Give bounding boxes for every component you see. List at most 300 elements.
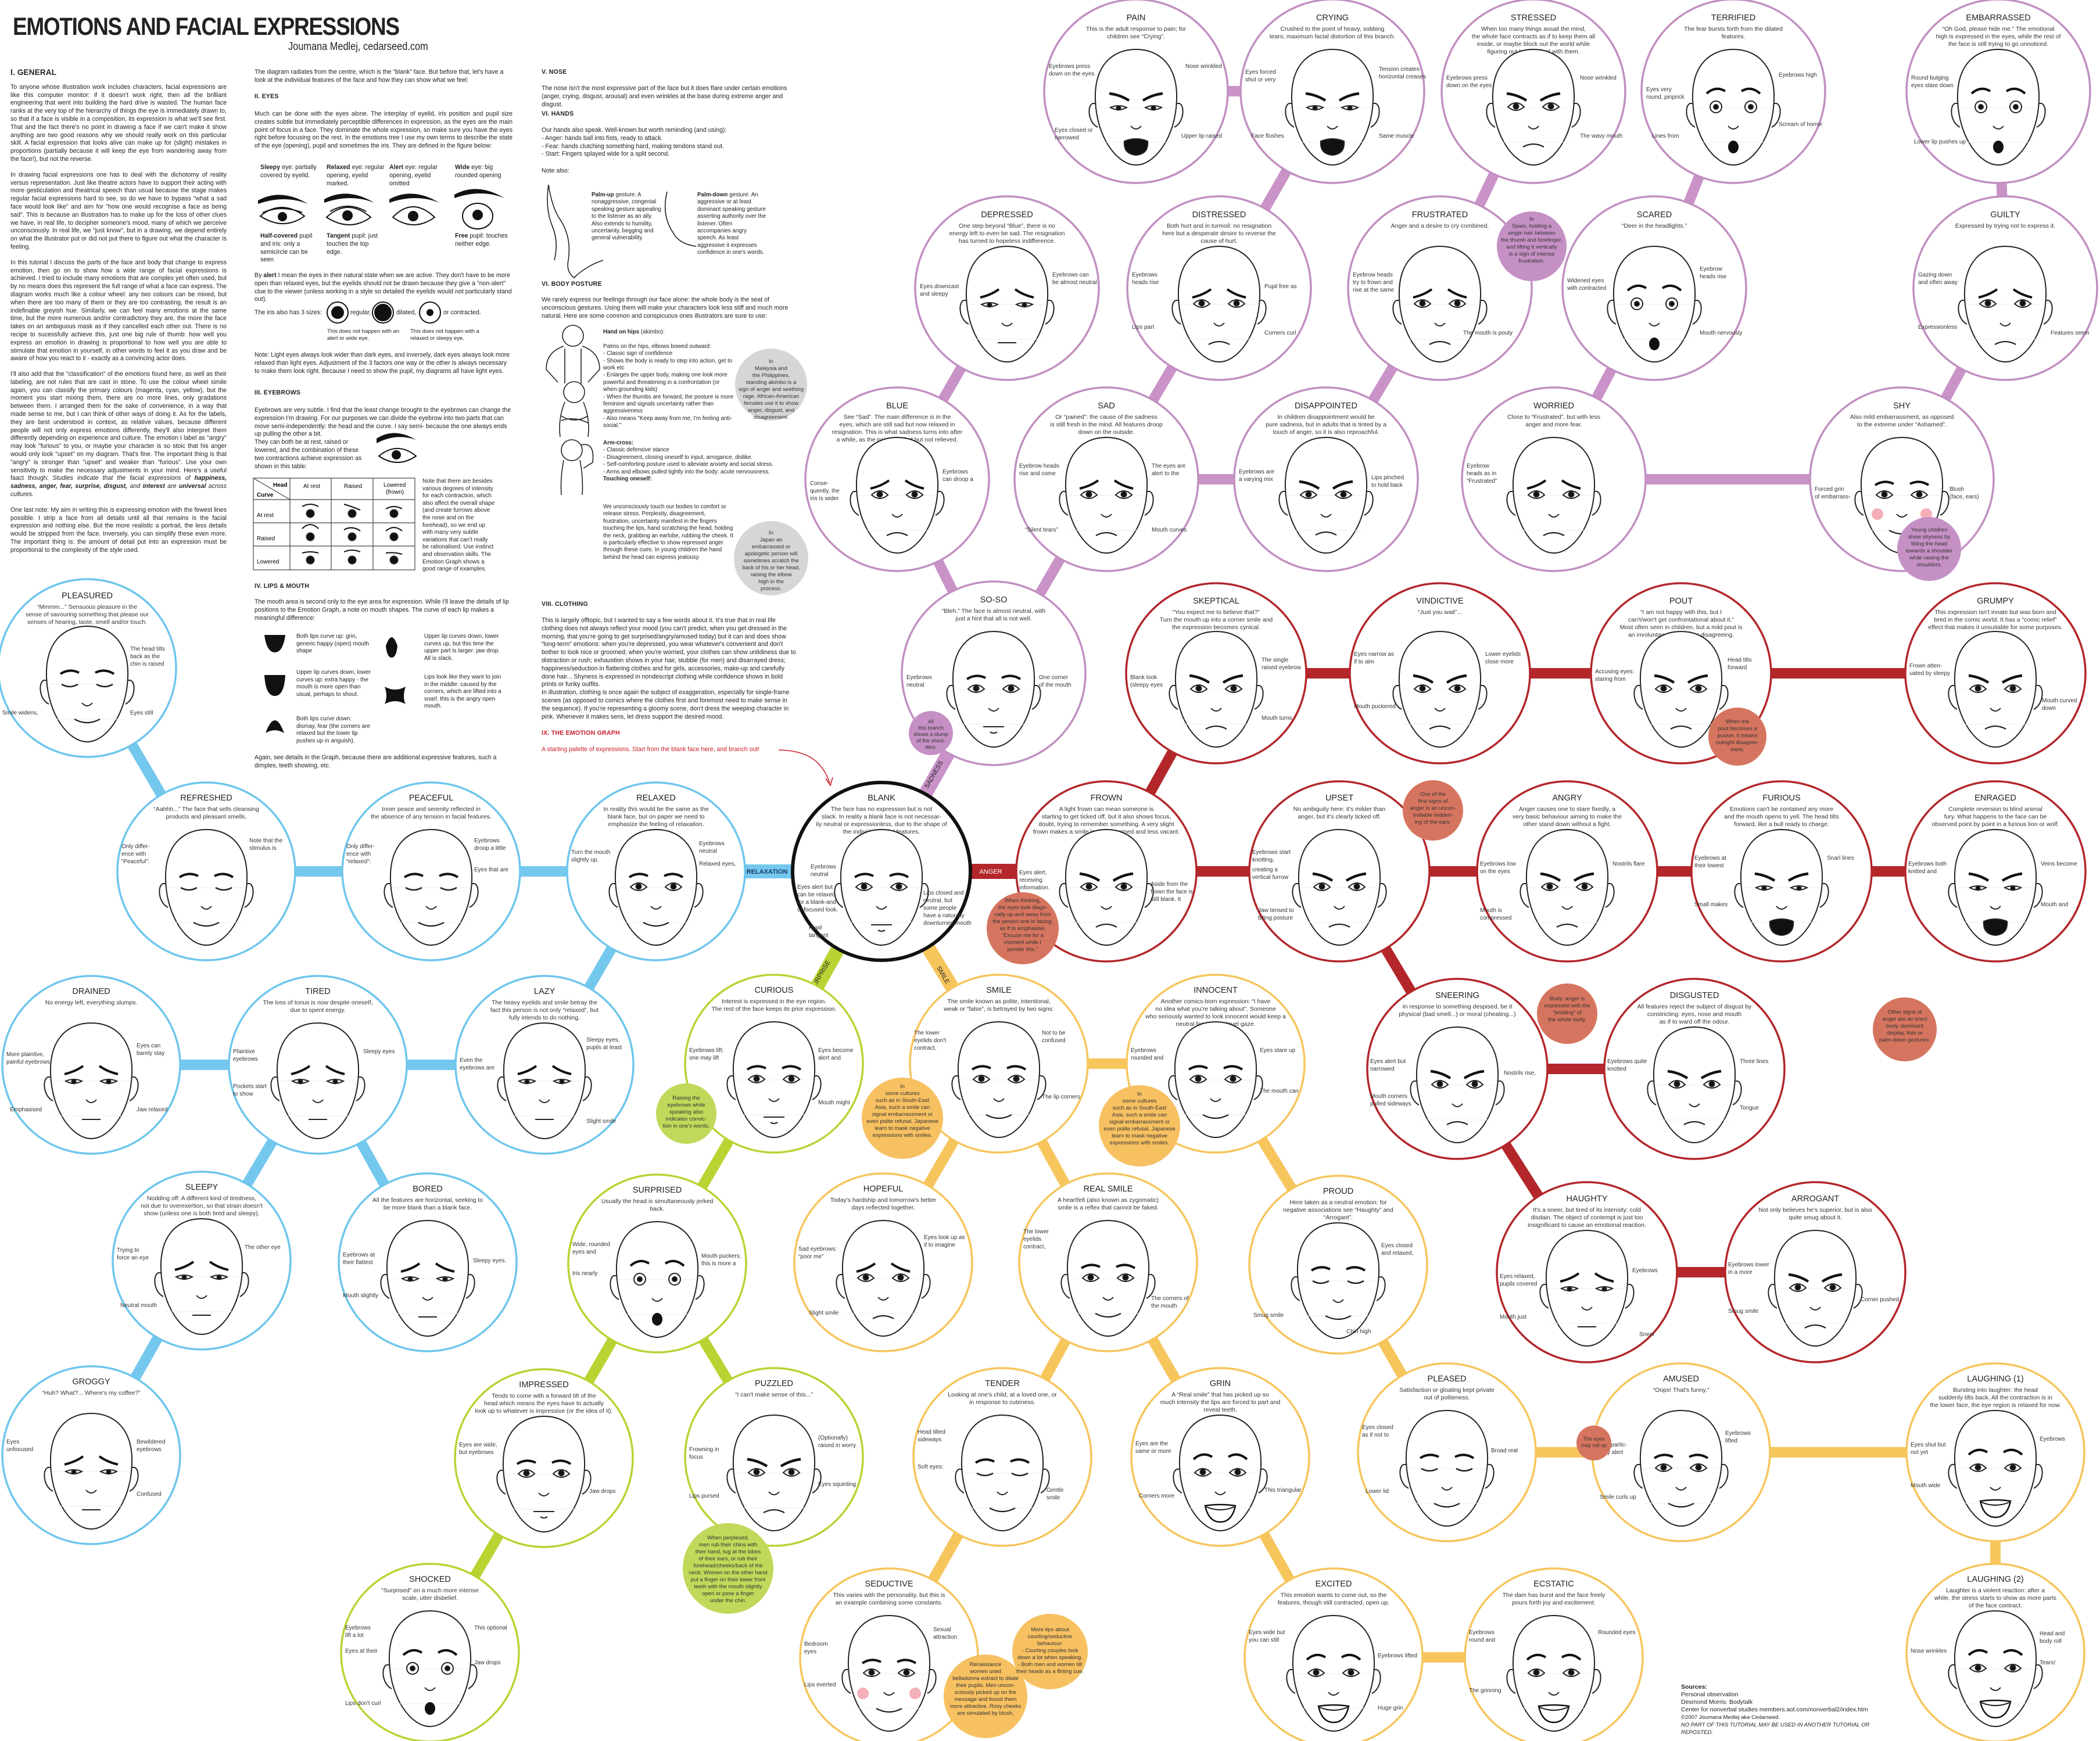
circle: HAUGHTY: [1497, 1182, 1677, 1362]
circle: SNEERING: SNEERING: [1435, 991, 1479, 1000]
circle: REAL SMILE: The corners of: [1151, 1295, 1189, 1302]
circle: GRIN: much intensity the lips are forced to part and: [1160, 1399, 1280, 1406]
circle: HOPEFUL: Sad eyebrows:: [798, 1246, 837, 1252]
circle: GUILTY: GUILTY: [1990, 210, 2020, 220]
text: palm gestures: Palm-up gesture: A nonaggressive, congenial speaking gesture appealing to the listener as an ally. Also extends to humility, uncertainty, begging and general vulnerability.: [592, 192, 661, 241]
circle: BLANK: unfocused look.: [797, 907, 838, 913]
circle: SHOCKED: lift a lot: [345, 1632, 364, 1639]
callout: haughty eyes: may roll up: [1581, 1442, 1607, 1448]
callout: pout: pout becomes a: [1718, 726, 1758, 732]
circle: LAZY: fully intends to do nothing.: [509, 1014, 580, 1021]
circle: SURPRISED: Mouth puckers;: [701, 1253, 741, 1259]
callout: puzzled: [683, 1523, 773, 1614]
circle: LAUGHING (1): the lower face, the eye region is relaxed for now.: [1930, 1402, 2061, 1409]
circle: FURIOUS: and the mouth opens to yell. The head tilts: [1724, 813, 1839, 820]
callout: akimbo grey: disagreement.: [754, 414, 789, 421]
heading: IV. LIPS & MOUTH: IV. LIPS & MOUTH: [255, 583, 309, 590]
circle: GUILTY: Features seem: [2051, 330, 2090, 336]
circle: SURPRISED: Wide, rounded: [572, 1241, 610, 1248]
circle: LAUGHING (2): [1907, 1564, 2084, 1741]
circle: PROUD: Chin high: [1346, 1329, 1371, 1335]
circle: SAD: “Silent tears”: [1025, 527, 1058, 533]
callout: smile cultures: In: [900, 1083, 905, 1090]
circle: DRAINED: DRAINED: [72, 987, 110, 996]
connectors: green surprise branch: [430, 871, 881, 1653]
circle: SHY: Forced grin: [1815, 486, 1844, 493]
eye labels: Sleepy eye: partially covered by eyelid.: [260, 164, 317, 179]
circle: ENRAGED: ENRAGED: [1974, 794, 2016, 803]
circle: SURPRISED: Usually the head is simultaneously jerked: [601, 1198, 713, 1205]
circle: ARROGANT: quite smug about it.: [1789, 1214, 1842, 1221]
circle: INNOCENT: [1127, 975, 1305, 1153]
callout: first signs of anger: trollable redden-: [1413, 812, 1453, 819]
circle: POUT: Head tilts: [1728, 657, 1752, 663]
circle: PLEASED: Eyes closed: [1362, 1424, 1393, 1431]
circle: RELAXED: Turn the mouth: [571, 849, 610, 856]
text: - Start: Fingers splayed wide for a split second.: [542, 150, 669, 157]
circle: SMILE: Not to be: [1042, 1030, 1066, 1036]
circle: PLEASURED: sense of savouring something that please our: [26, 611, 149, 618]
circle: BLANK: Eyes alert but: [797, 884, 833, 891]
circle: LAZY: eyebrows are: [460, 1065, 494, 1071]
circle: CURIOUS: The rest of the face keeps its prior expression.: [711, 1006, 837, 1013]
callout: akimbo grey: Malaysia and: [755, 365, 787, 372]
callout: innocent cultures: even polite refusal. Japanese: [1103, 1126, 1176, 1132]
text: Both lips curve up: grin, generic happy (open) mouth shape: [296, 633, 369, 654]
callout: renaissance: message and found them: [954, 1696, 1017, 1703]
circle: GROGGY: Eyes: [6, 1439, 19, 1445]
circle: DISGUSTED: knotted: [1607, 1066, 1626, 1072]
circle: WORRIED: “Frustrated”: [1467, 478, 1497, 484]
circle: AMUSED: [1592, 1363, 1770, 1541]
callout: curious eyebrows: indicates convic-: [666, 1116, 707, 1122]
circle: RELAXED: blank face, but on paper we need to: [608, 813, 705, 820]
circle: BLUE: See “Sad”. The main difference is in the: [844, 414, 951, 421]
callout: innocent cultures: [1099, 1085, 1180, 1166]
iris text: The iris also has 3 sizes:: [255, 309, 322, 316]
circle: FURIOUS: Emotions can't be contained any more: [1730, 806, 1833, 813]
circle: HAUGHTY: insignificant to cause an emotional reaction.: [1528, 1222, 1646, 1229]
circle: BLANK: neutral: [811, 871, 829, 878]
callout: first signs of anger: One of the: [1420, 791, 1446, 798]
callout: courting tips: behaviour:: [1037, 1641, 1063, 1647]
title: EMOTIONS AND FACIAL EXPRESSIONS: [13, 13, 399, 41]
circle: GRIN: Corners more: [1139, 1493, 1175, 1499]
circle: EMBARRASSED: high is expressed in the eyes, while the rest of: [1936, 33, 2060, 40]
circle: POUT: Most often seen in children, but a mild pout is: [1620, 624, 1742, 631]
branch label: SURPRISE: SURPRISE: [809, 959, 832, 991]
circle: INNOCENT: rounded and: [1131, 1055, 1163, 1061]
circle: STRESSED: When too many things assail the mind,: [1481, 26, 1586, 33]
callout: pout: [1708, 708, 1766, 766]
circle: STRESSED: Eyebrows press: [1446, 75, 1488, 81]
circle: SCARED: Widened eyes: [1567, 278, 1604, 284]
callout: innocent cultures: expressions with smiles.: [1110, 1140, 1169, 1146]
circle: FRUSTRATED: rise at the same: [1353, 287, 1395, 293]
circle: SHY: SHY: [1893, 401, 1911, 411]
circle: ANGRY: Anger causes one to stare fixedly, a: [1519, 806, 1615, 813]
figure: hands: [547, 185, 696, 278]
circle: POUT: staring from: [1595, 676, 1626, 683]
callout: courting tips: [1012, 1614, 1088, 1689]
circle: CURIOUS: alert and: [818, 1055, 841, 1061]
text: alert: By alert I mean the eyes in their natural state when we are active. They don't have to be more open than relaxed eyes, but the eyelids should not be drawn because they give a "non-alert" clue to the viewer (unless working in a style so detailed the eyelids would not particularly stand out).: [255, 272, 512, 303]
circle: LAUGHING (2): Head and: [2040, 1631, 2065, 1637]
circle: PROUD: negative associations see “Haughty” and: [1283, 1207, 1393, 1214]
callout: frown thinking: ponder this.”: [1008, 946, 1038, 953]
circle: CURIOUS: Interest is expressed in the eye region.: [722, 998, 826, 1005]
circle: SHOCKED: Jaw drops: [474, 1660, 501, 1666]
callout: enraged signs: anger are an erect: [1882, 1016, 1927, 1022]
circle: BLANK: Lips closed and: [923, 890, 963, 896]
circle: PUZZLED: [685, 1368, 863, 1546]
callout: smile cultures: signal embarrassment or: [872, 1111, 933, 1118]
callout: smile cultures: even polite refusal. Japanese: [866, 1118, 938, 1125]
circle: LAZY: Even the: [460, 1057, 483, 1064]
callout: smile cultures: [862, 1078, 943, 1159]
circle: TENDER: smile: [1047, 1495, 1060, 1501]
callout: haughty eyes: The eyes: [1583, 1436, 1605, 1442]
circle: UPSET: No ambiguity here: it's milder than: [1293, 806, 1385, 813]
graph and figures: Raised: [257, 536, 275, 542]
text: This is largely offtopic, but I wanted to say a few words about it. It's true that in real life clothing does not always reflect your mood (you can't predict, when you get dressed in the morning, that you're going to get surprised/angry/amused today) but it can and does show “long-term” emotions: when you're depressed, you wear whatever's convenient and don't bother to look nice or groomed; when you're worried, your clothes can show untidiness due to distraction or rush; exhaustion shows in your hair, stubble (for men) and disarrayed dress; happiness/seduction in flattering clothes and for girls, accessories, make-up and carefully done hair... Shyness is expressed in nondescript clothing while confidence shows in bold prints or funky outfits.: [542, 617, 796, 688]
text: eyes: Much can be done with the eyes alone. The interplay of eyelid, iris position and pupil size creates subtle but immediately perceptible differences in expression, as the eyes are the main point of focus in a face. They dominate the whole expression, so make sure you have the eyes right before focusing on the rest. In the emotions tree I use my own terms to describe the state of the eye (opening), pupil and sometimes the iris. They are defined in the figure below:: [255, 110, 513, 149]
circle: BLANK: neutral, but: [923, 898, 952, 904]
circle: GRIN: This triangular: [1264, 1487, 1302, 1494]
circle: LAUGHING (1): Eyebrows: [2040, 1436, 2065, 1442]
circle: ECSTATIC: round and: [1469, 1637, 1495, 1643]
text: eyebrows: [255, 407, 511, 470]
circle: PLEASED: as if not to: [1362, 1432, 1389, 1438]
circle: HAUGHTY: Eyes relaxed,: [1500, 1273, 1535, 1280]
circle: AMUSED: ularly alert: [1596, 1449, 1623, 1456]
circle: ENRAGED: knitted and: [1908, 868, 1937, 875]
circle: BLUE: eyes, which are still sad but now relaxed in: [839, 421, 955, 428]
circle: BLUE: a while, as the pain is dulled but not relieved.: [837, 436, 958, 443]
circle: BLUE: Eyebrows: [943, 469, 968, 475]
figure: body postures: [546, 325, 600, 495]
callout: puzzled: When perplexed,: [707, 1535, 749, 1541]
circle: ANGRY: ANGRY: [1552, 794, 1582, 803]
circle: PEACEFUL: ence with: [346, 851, 371, 857]
callout: curious eyebrows: tion in one's words.: [662, 1123, 710, 1129]
callout: courting tips: courting/seductive: [1028, 1634, 1072, 1640]
circle: DRAINED: More plaintive,: [6, 1051, 44, 1058]
circle: SEDUCTIVE: eyes: [804, 1649, 816, 1655]
circle: DEPRESSED: Eyebrows can: [1052, 272, 1089, 278]
circle: BLUE: can droop a: [943, 476, 973, 483]
circle: SURPRISED: [568, 1175, 746, 1352]
circle: GROGGY: Confused: [137, 1491, 162, 1498]
circle: SO-SO: of the mouth: [1039, 682, 1071, 688]
callout: angry body: [1537, 983, 1597, 1044]
text: eyebrows: They can both be at rest, raised or lowered, and the combination of these two contractions achieve expression as shown in this table:: [255, 439, 361, 470]
column 1: general: In drawing facial expressions one has to deal with the dichotomy of reality versus representation. Just like theatre actors have to support their acting with more gesticulation and theatrical speech than usual because the stage makes regular facial expressions hard to see, so do we have to bypass "what a sad face would look like" and aim for "how one would recognise a face as being sad". This is because an illustration has to make up for the loss of other clues we have, in real life, to decipher someone's mood, many of which we perceive unconsciously. In real life, we "just know", but in a drawing, we depend entirely on what the illustrator put or did not put there to figure out what the character is feeling.: [10, 171, 227, 250]
circle: LAUGHING (2): Tears!: [2040, 1660, 2055, 1666]
circle: SHOCKED: scale, utter disbelief.: [402, 1595, 458, 1602]
circle: UPSET: biting posture: [1258, 915, 1293, 921]
callout: frown thinking: When thinking,: [1005, 898, 1041, 904]
graph and figures: (frown): [386, 489, 404, 496]
circle: TERRIFIED: [1642, 0, 1825, 183]
connectors: yellow smile branch: [881, 871, 1995, 1657]
circle: BORED: Mouth slightly: [343, 1293, 378, 1299]
sources: [1681, 1683, 1869, 1736]
circle: DRAINED: painful eyebrows: [6, 1059, 50, 1065]
circle: SCARED: Eyebrow: [1700, 266, 1723, 272]
circle: REAL SMILE: eyelids: [1023, 1236, 1041, 1243]
circle: VINDICTIVE: “Just you wait”...: [1418, 609, 1462, 616]
circle: PEACEFUL: droop a little: [474, 845, 506, 852]
circle: ENRAGED: Complete reversion to blind animal: [1948, 806, 2042, 813]
circle: PLEASED: PLEASED: [1428, 1374, 1466, 1384]
circle: VINDICTIVE: Lower eyelids: [1485, 651, 1521, 658]
callout: japan grey: embarrassed or: [752, 544, 790, 550]
callout: courting tips: More tips about: [1031, 1627, 1069, 1633]
callout: frown thinking: [987, 892, 1059, 964]
circle: SEDUCTIVE: Sexual: [933, 1627, 951, 1633]
circle: UPSET: creating a: [1252, 867, 1278, 873]
circle: SO-SO: [902, 581, 1085, 765]
graph and figures: At rest: [303, 483, 320, 490]
circle: SHY: to the extreme under “Ashamed”.: [1857, 421, 1947, 428]
text: Again, see details in the Graph, because there are additional expressive features, such a dimples, teeth showing, etc.: [255, 754, 496, 769]
circle: SKEPTICAL: The single: [1262, 657, 1289, 663]
circle: STRESSED: STRESSED: [1511, 13, 1556, 23]
circle: FURIOUS: forward, like a bull ready to charge.: [1734, 821, 1829, 828]
circle: TIRED: Pockets start: [233, 1083, 267, 1090]
circle: DEPRESSED: has turned to hopeless indifference.: [959, 238, 1055, 245]
circle: VINDICTIVE: Mouth puckered: [1354, 703, 1396, 710]
circle: EXCITED: Eyes wide but: [1249, 1629, 1285, 1636]
circle: SHOCKED: Eyebrows: [345, 1625, 371, 1631]
circle: HAUGHTY: Mouth just: [1500, 1314, 1526, 1320]
text: graph intro: A starting palette of expressions. Start from the blank face here, and branch out!: [542, 746, 759, 753]
circle: GROGGY: unfocused: [6, 1446, 33, 1453]
circle: REFRESHED: ence with: [121, 851, 146, 857]
circle: SURPRISED: SURPRISED: [633, 1186, 682, 1195]
circle: SAD: Or “pained”: the cause of the sadness: [1055, 414, 1157, 421]
circle: FROWN: doubt, trying to remember something. A very slight: [1038, 821, 1174, 828]
circle: DISGUSTED: [1604, 979, 1784, 1159]
callout: shy: towards a shoulder: [1906, 548, 1952, 554]
circle: PLEASURED: Eyes still: [130, 710, 153, 716]
circle: FURIOUS: [1692, 781, 1872, 961]
callout: akimbo grey: rage. African-American: [743, 393, 799, 400]
callout: innocent cultures: Asia, such a smile can: [1112, 1112, 1167, 1118]
circle: DEPRESSED: One step beyond “Blue”, there is no: [959, 222, 1055, 229]
text: Touching oneself:: [603, 476, 652, 482]
circle: WORRIED: [1462, 387, 1646, 571]
circle: BLANK: BLANK: [868, 794, 895, 803]
circle: CRYING: Crushed to the point of heavy, sobbing: [1280, 26, 1385, 33]
circle: DISAPPOINTED: Eyebrows are: [1239, 469, 1275, 475]
circle: POUT: [1591, 583, 1771, 763]
circle: TIRED: Plaintive: [233, 1049, 255, 1055]
circle: CRYING: Face flushes: [1251, 133, 1284, 139]
circle: FRUSTRATED: The mouth is pouty: [1463, 330, 1513, 336]
circle: SHY: Also mild embarrassment, as opposed: [1850, 414, 1954, 421]
callout: japan grey: In: [769, 530, 773, 536]
callout: smile cultures: such as in South-East: [876, 1097, 930, 1104]
circle: ANGRY: Eyebrows low: [1480, 861, 1516, 867]
text: mouth: The mouth area is second only to the eye area for expression. While I'll leave the details of lip positions to the Emotion Graph, a note on mouth shapes. The curve of each lip makes a meaningful difference:: [255, 598, 509, 622]
circle: PEACEFUL: the absence of any tension in facial features.: [371, 813, 492, 820]
circle: INNOCENT: INNOCENT: [1194, 986, 1238, 995]
circle: PLEASURED: [0, 579, 176, 757]
circle: ECSTATIC: ECSTATIC: [1533, 1580, 1574, 1589]
circle: GROGGY: “Huh? What?... Where's my coffee?”: [42, 1390, 141, 1397]
callout: renaissance: their pupils. Men uncon-: [956, 1682, 1015, 1689]
circle: FURIOUS: FURIOUS: [1762, 794, 1801, 803]
circle: DISTRESSED: Pupil free as: [1264, 283, 1297, 290]
heading: II. EYES: II. EYES: [255, 93, 279, 100]
circle: UPSET: Eyebrows start: [1252, 849, 1291, 856]
circle: FROWN: still blank. It: [1151, 896, 1181, 903]
callout: frown thinking: as if to emphasise,: [999, 925, 1046, 932]
circle: GRUMPY: This expression isn't innate but was born and: [1934, 609, 2056, 616]
circle: SMILE: The lower: [914, 1030, 940, 1036]
circle: AMUSED: AMUSED: [1663, 1374, 1699, 1384]
circle: PAIN: down on the eyes: [1049, 71, 1094, 77]
sources: ©2007 Joumana Medlej aka Cedarseed.: [1681, 1714, 1780, 1721]
circle: EMBARRASSED: “Oh God, please hide me.” The emotional: [1942, 26, 2055, 33]
circle: ARROGANT: Smug smile: [1728, 1308, 1759, 1315]
circle: INNOCENT: Eyes stare up: [1260, 1047, 1296, 1054]
figure: small eyebrow drawing: [377, 433, 416, 462]
text: regular,: [350, 309, 371, 316]
circle: ECSTATIC: The grinning: [1469, 1688, 1501, 1694]
callout: frustrated: Spain, holding a: [1512, 223, 1552, 229]
circle: SHY: of embarrass-: [1815, 494, 1851, 500]
circle: ARROGANT: Not only believes he's superior, but is also: [1758, 1207, 1872, 1214]
circle: DISGUSTED: DISGUSTED: [1670, 991, 1719, 1000]
circle: CURIOUS: [685, 975, 863, 1153]
circle: ECSTATIC: pours forth joy and excitement.: [1512, 1599, 1596, 1606]
circle: GUILTY: and often away: [1918, 279, 1958, 286]
callout: frustrated: single hair between: [1508, 230, 1556, 236]
circle: HOPEFUL: [794, 1173, 972, 1351]
circle: SHOCKED: Lips don't curl: [345, 1700, 381, 1707]
circle: HOPEFUL: “poor me”: [798, 1254, 823, 1260]
circle: VINDICTIVE: [1350, 583, 1530, 763]
circle: SO-SO: One corner: [1039, 674, 1069, 681]
circle: LAUGHING (2): of the face contract.: [1969, 1602, 2022, 1609]
callout: so-so slump: [909, 711, 953, 755]
circle: TENDER: Head tilted: [918, 1429, 945, 1435]
circle: SNEERING: pulled sideways: [1370, 1101, 1411, 1107]
circle: TIRED: Sleepy eyes: [363, 1049, 395, 1055]
circle: PLEASED: [1358, 1363, 1536, 1541]
circle: SKEPTICAL: SKEPTICAL: [1193, 597, 1239, 606]
figure: mouth shapes: [264, 635, 406, 733]
circle: GROGGY: [2, 1366, 180, 1544]
circle: EMBARRASSED: the face is still trying to go unnoticed.: [1948, 41, 2048, 48]
branch label: SMILE: SMILE: [935, 965, 951, 985]
callout: enraged signs: display, fists or: [1887, 1030, 1923, 1036]
callout: smile cultures: some cultures: [885, 1090, 920, 1097]
circle: SNEERING: [1367, 979, 1547, 1159]
circle: SHOCKED: This optional: [474, 1625, 507, 1631]
circle: POUT: forward: [1728, 665, 1747, 671]
circle: WORRIED: Close to “Frustrated”, but with less: [1507, 414, 1600, 421]
circle: HAUGHTY: It's a sneer, but tired of its intensity: cold: [1533, 1207, 1641, 1214]
circle: PLEASURED: The head tilts: [130, 646, 165, 652]
circle: DEPRESSED: be almost neutral: [1052, 279, 1097, 286]
circle: POUT: can't/won't get confrontational about it.”: [1628, 616, 1735, 623]
circle: UPSET: anger, but it's clearly ticked off.: [1298, 813, 1381, 820]
circle: LAZY: Sleepy eyes,: [586, 1037, 619, 1043]
heading: IX. THE EMOTION GRAPH: IX. THE EMOTION GRAPH: [542, 730, 620, 737]
circle: CURIOUS: CURIOUS: [755, 986, 793, 995]
circle: SLEEPY: not due to overexertion, so that strain doesn't: [141, 1202, 263, 1209]
circle: REAL SMILE: smile is a reflex that cannot be faked.: [1058, 1204, 1159, 1211]
text: Free pupil: touches neither edge.: [455, 232, 508, 247]
circle: BLUE: resignation. This is what sadness turns into after: [832, 429, 963, 436]
text: - Disagreement, closing oneself to input, arrogance, dislike.: [603, 454, 752, 461]
circle: PLEASURED: chin is raised: [130, 661, 164, 667]
circle: SO-SO: Eyebrows: [906, 674, 932, 681]
callout: akimbo grey: anger, disgust, and: [748, 407, 794, 414]
callout: enraged signs: body, dominant: [1886, 1023, 1923, 1029]
circle: DISAPPOINTED: DISAPPOINTED: [1295, 401, 1357, 411]
circle: GROGGY: GROGGY: [72, 1377, 110, 1387]
callout: first signs of anger: anger is an uncon-: [1410, 805, 1456, 812]
circle: ANGRY: Mouth is: [1480, 907, 1502, 914]
circle: LAZY: The heavy eyelids and smile betray the: [492, 999, 597, 1006]
circle: EXCITED: EXCITED: [1316, 1580, 1352, 1589]
circle: ARROGANT: Eyebrows lower: [1728, 1262, 1769, 1268]
callout: smile cultures: learn to mask negative: [875, 1125, 930, 1132]
circle: ARROGANT: Corner pushed: [1861, 1297, 1899, 1303]
circle: EMBARRASSED: EMBARRASSED: [1966, 13, 2031, 23]
callout: akimbo grey: In: [769, 358, 773, 365]
callout: renaissance: [944, 1654, 1027, 1738]
callout: frown thinking: nally up and away from: [994, 911, 1051, 918]
circle: DISAPPOINTED: Lips pinched: [1371, 475, 1404, 481]
circle: GUILTY: [1913, 196, 2097, 380]
text: - Anger: hands ball into fists, ready to attack.: [542, 135, 662, 142]
circle: UPSET: [1249, 781, 1429, 961]
circle: IMPRESSED: Jaw drops: [589, 1488, 616, 1495]
circle: FURIOUS: Small makes: [1694, 902, 1728, 908]
red arrow to blank face: [779, 750, 830, 783]
circle: SLEEPY: Nodding off: A different kind of tiredness,: [147, 1195, 256, 1202]
circle: GRUMPY: effect that makes it unsuitable for some purposes.: [1928, 624, 2063, 631]
circle: SHY: Blush: [1950, 486, 1964, 493]
callout: puzzled: under the chin.: [710, 1598, 746, 1604]
circle: LAUGHING (1): Bursting into laughter: the head: [1953, 1387, 2038, 1394]
branch label: ANGER: ANGER: [979, 868, 1002, 875]
connectors: red anger branch: [881, 673, 1995, 1272]
circle: SMILE: weak or “false”, is betrayed by two signs:: [943, 1006, 1054, 1013]
circle: SLEEPY: Trying to: [117, 1247, 139, 1254]
circle: WORRIED: heads as in: [1467, 471, 1496, 477]
circle: PEACEFUL: Eyebrows: [474, 838, 500, 844]
circle: EMBARRASSED: [1907, 0, 2090, 183]
circle: LAUGHING (2): body roll: [2040, 1638, 2062, 1645]
circle: DRAINED: [2, 976, 180, 1154]
circle: BORED: Sleepy eyes.: [473, 1258, 506, 1264]
callout: akimbo grey: standing akimbo is a: [746, 379, 797, 386]
circle: DISGUSTED: constricting: eyes, nose and mouth: [1647, 1011, 1741, 1018]
callout: renaissance: sciously picked up on the: [955, 1689, 1016, 1696]
circle: DISGUSTED: All features reject the subject of disgust by: [1637, 1003, 1752, 1010]
text: Wide eye: big rounded opening: [455, 164, 501, 179]
circle: GROGGY: eyebrows: [137, 1446, 162, 1453]
circle: ECSTATIC: Rounded eyes: [1598, 1629, 1635, 1636]
circle: CRYING: Eyes forced: [1245, 69, 1276, 76]
